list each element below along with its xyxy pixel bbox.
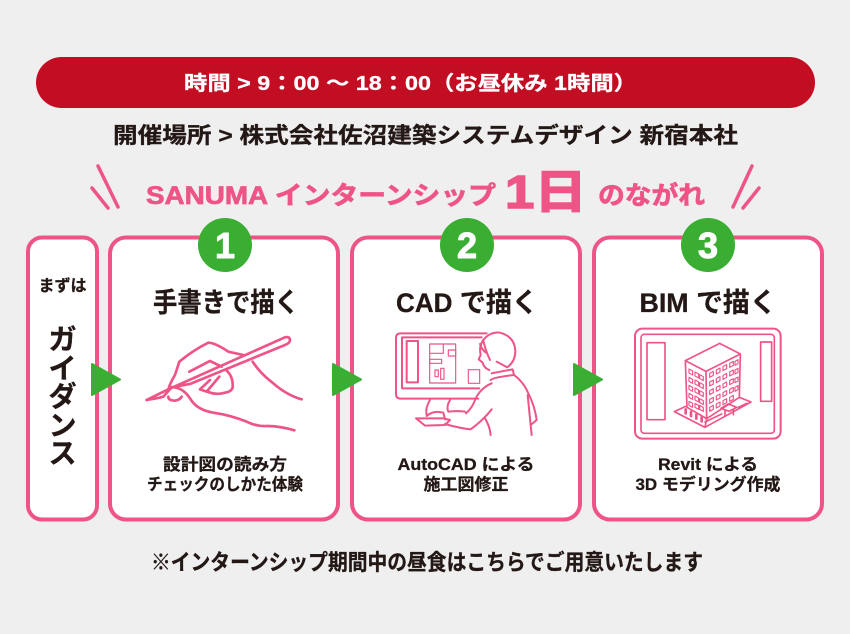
panel: step 2 [352, 218, 580, 520]
step 1 heading: 手書きで描く [153, 288, 299, 318]
step 3 description: 3D モデリング作成 [636, 474, 780, 494]
icon: person at CAD monitor [396, 333, 537, 435]
title: SANUMA インターンシップ [146, 182, 496, 210]
panel: guidance: ス [48, 438, 77, 469]
panel: guidance: イ [48, 353, 77, 384]
step 2 description: AutoCAD による [398, 455, 534, 474]
step 3 badge [681, 218, 735, 272]
location text: 開催場所 > 株式会社佐沼建築システムデザイン 新宿本社 [113, 123, 738, 148]
panel: guidance: ン [48, 410, 77, 441]
arrow: step 2 to step 3 [574, 364, 602, 395]
step 2 description: 施工図修正 [424, 475, 508, 494]
panel: guidance: ガ [48, 324, 77, 355]
step 1 description: 設計図の読み方 [163, 454, 287, 474]
panel: step 1 [110, 218, 338, 520]
step 1 badge: 1 [215, 225, 235, 266]
title [146, 166, 705, 218]
step 2 description [398, 455, 534, 494]
step 2 badge: 2 [457, 225, 477, 266]
panel: guidance [28, 238, 97, 520]
step 1 badge [198, 218, 252, 272]
step 2 heading: CAD で描く [396, 288, 538, 318]
step 3 badge: 3 [698, 225, 718, 266]
footnote: ※インターンシップ期間中の昼食はこちらでご用意いたします [151, 550, 703, 575]
icon: BIM building on screen [635, 329, 781, 439]
arrow: step 1 to step 2 [333, 364, 361, 395]
panel: guidance: ダ [48, 380, 77, 412]
panel: step 3 [594, 218, 822, 520]
step 3 description [636, 455, 780, 494]
arrow: guidance to step 1 [92, 364, 120, 395]
title: 1日 [505, 166, 587, 218]
title accent lines right [733, 166, 759, 208]
panel: guidance: まずは [38, 277, 87, 295]
step 1 description [147, 454, 303, 494]
banner: hours: 時間 > 9：00 〜 18：00（お昼休み 1時間） [184, 72, 637, 95]
icon: hand with pen [147, 337, 302, 430]
banner: hours [36, 57, 815, 108]
step 3 heading: BIM で描く [640, 288, 776, 318]
step 3 description: Revit による [658, 455, 758, 474]
step 2 badge [440, 218, 494, 272]
step 1 description: チェックのしかた体験 [147, 475, 303, 494]
title: のながれ [598, 181, 705, 210]
title accent lines left [92, 166, 118, 208]
